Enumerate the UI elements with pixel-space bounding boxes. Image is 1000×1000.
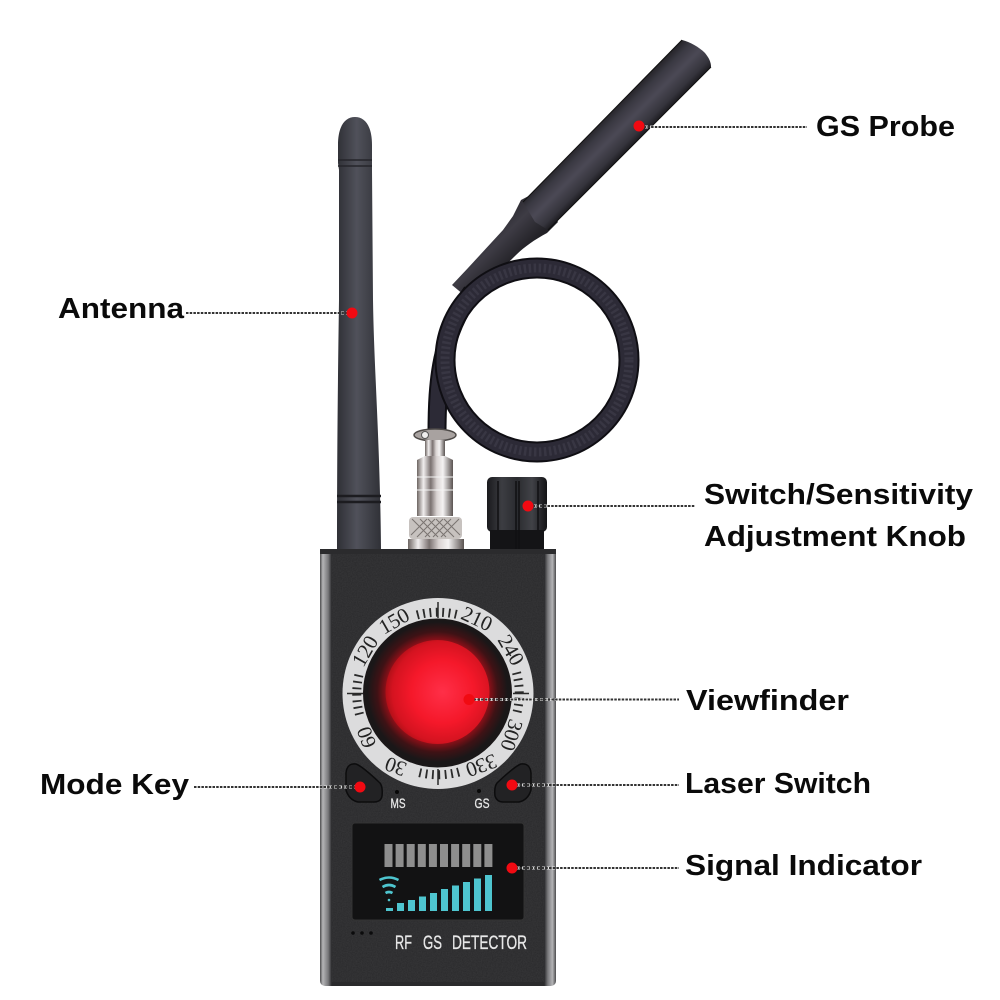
MS label: MS: [390, 795, 406, 811]
device name: [395, 933, 527, 954]
dial ring: [342, 598, 534, 789]
GS label: GS: [474, 795, 490, 811]
panel: detector body: [320, 549, 556, 986]
icon: laser switch button: [495, 764, 531, 802]
icon: sensitivity knob: [487, 477, 547, 549]
icon: gooseneck cable: [437, 268, 629, 452]
icon: wifi: [380, 878, 398, 901]
icon: mode key button: [346, 764, 382, 802]
ring scale ticks: [347, 602, 529, 785]
GS label: [474, 789, 490, 811]
callout: Viewfinder: [464, 685, 849, 717]
MS label: [390, 790, 406, 811]
ring scale numbers: 120: [347, 631, 383, 671]
callout: Laser Switch: Laser Switch: [685, 768, 871, 800]
callout: GS Probe: [634, 111, 955, 143]
icon: connector: [408, 429, 464, 549]
callout: Switch/Sensitivity Adjustment Knob: [522, 479, 973, 553]
callout: Mode Key: [40, 769, 366, 801]
icon: red viewfinder lens: [386, 640, 490, 744]
callout: Laser Switch: [506, 768, 871, 800]
callout: Antenna: [58, 293, 358, 325]
callout: Signal Indicator: [506, 850, 922, 882]
device name: GS: [423, 933, 442, 954]
device name: DETECTOR: [452, 933, 527, 954]
callout: Mode Key: Mode Key: [40, 769, 189, 801]
callout: Signal Indicator: Signal Indicator: [685, 850, 922, 882]
icon: GS probe: [452, 40, 711, 300]
teal signal bars: [386, 875, 492, 911]
callout: Switch/Sensitivity Adjustment Knob: Switch/Sensitivity: [704, 479, 973, 511]
grey level bars: [384, 844, 492, 867]
ring scale numbers: 150: [374, 603, 414, 639]
speaker holes: [351, 931, 373, 935]
ring scale numbers: 330: [462, 749, 500, 782]
callout: Switch/Sensitivity Adjustment Knob: Adjustment Knob: [704, 521, 966, 553]
ring scale numbers: [347, 601, 529, 782]
callout: Antenna: Antenna: [58, 293, 185, 325]
ring scale numbers: 60: [352, 723, 381, 751]
ring scale numbers: 240: [493, 630, 529, 670]
ring scale numbers: 210: [458, 601, 496, 636]
callout: GS Probe: GS Probe: [816, 111, 955, 143]
signal display screen: [352, 823, 524, 920]
icon: antenna: [337, 117, 381, 549]
ring scale numbers: 30: [382, 752, 410, 781]
device name: RF: [395, 933, 412, 954]
callout: Viewfinder: Viewfinder: [686, 685, 849, 717]
ring scale numbers: 300: [495, 716, 528, 754]
